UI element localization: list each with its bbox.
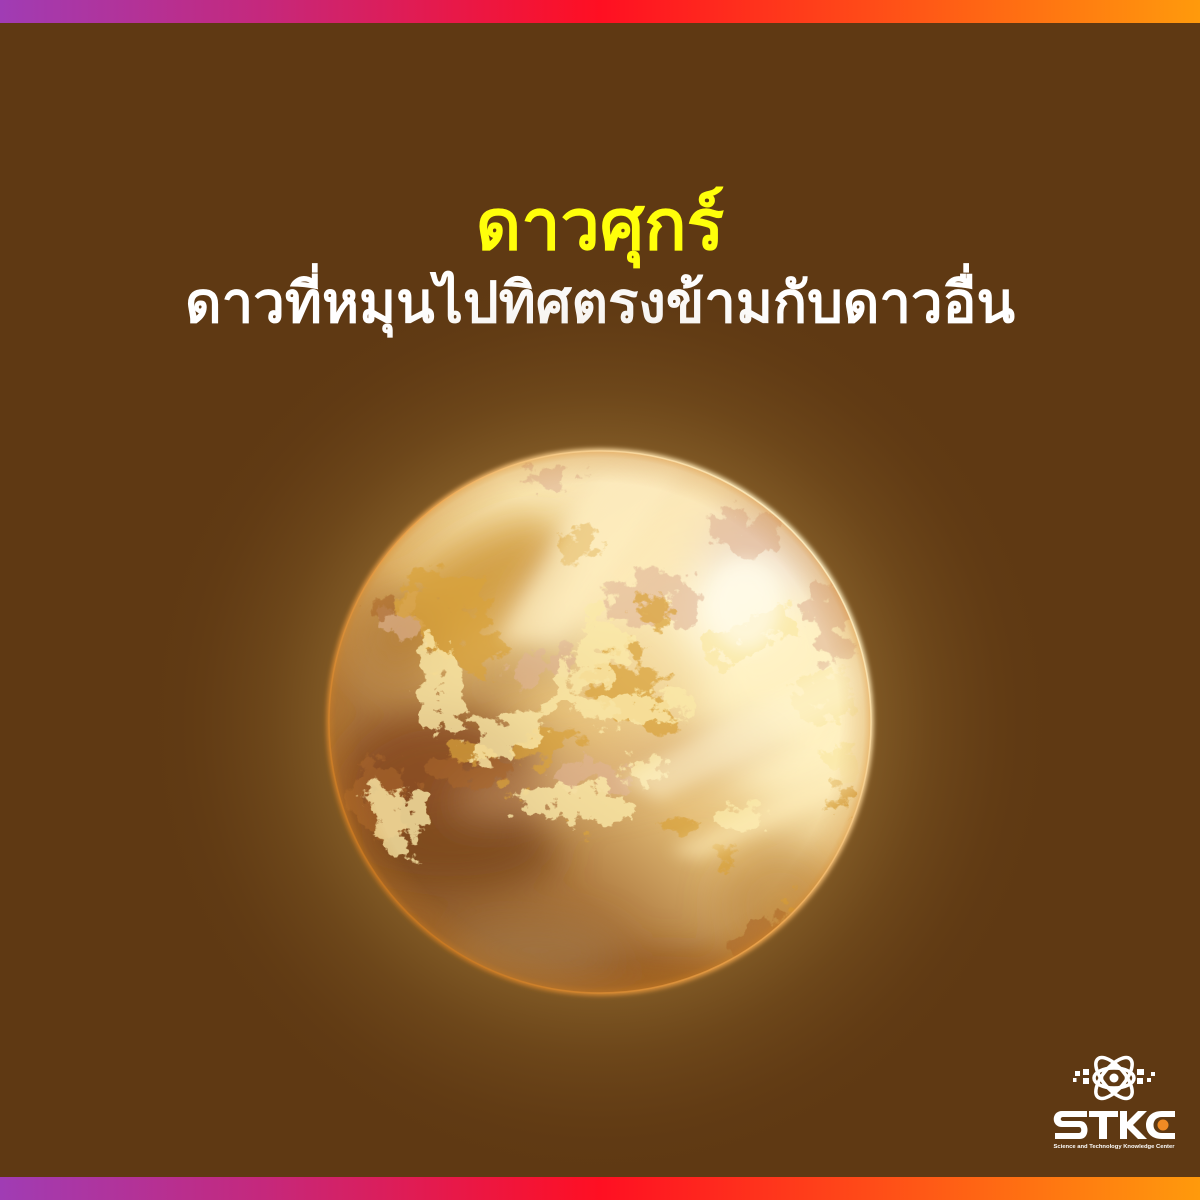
logo orange dot <box>1158 1120 1168 1130</box>
planet illustration <box>234 293 965 1086</box>
rim shading <box>328 450 872 994</box>
logo tagline: Science and Technology Knowledge Center <box>1054 1144 1175 1150</box>
top gradient bar <box>0 0 1200 23</box>
planet sphere <box>320 440 880 1000</box>
pale yellow veins <box>356 586 858 864</box>
gold patches <box>390 515 858 917</box>
dark rust patches <box>344 594 786 956</box>
planet thin edge <box>329 451 871 993</box>
logo: STKC <box>1054 1056 1175 1150</box>
title: Venus: ดาวศุกร์ <box>476 186 724 264</box>
pink patches <box>368 462 860 795</box>
glow halo <box>140 262 1060 1182</box>
planet rim glow <box>326 448 874 996</box>
logo wordmark <box>1054 1111 1175 1139</box>
bottom gradient bar <box>0 1177 1200 1200</box>
logo atom icon <box>1073 1052 1155 1104</box>
streak highlights <box>498 522 856 864</box>
subtitle: ดาวที่หมุนไปทิศตรงข้ามกับดาวอื่น <box>185 271 1015 334</box>
cloud bands <box>336 492 859 990</box>
